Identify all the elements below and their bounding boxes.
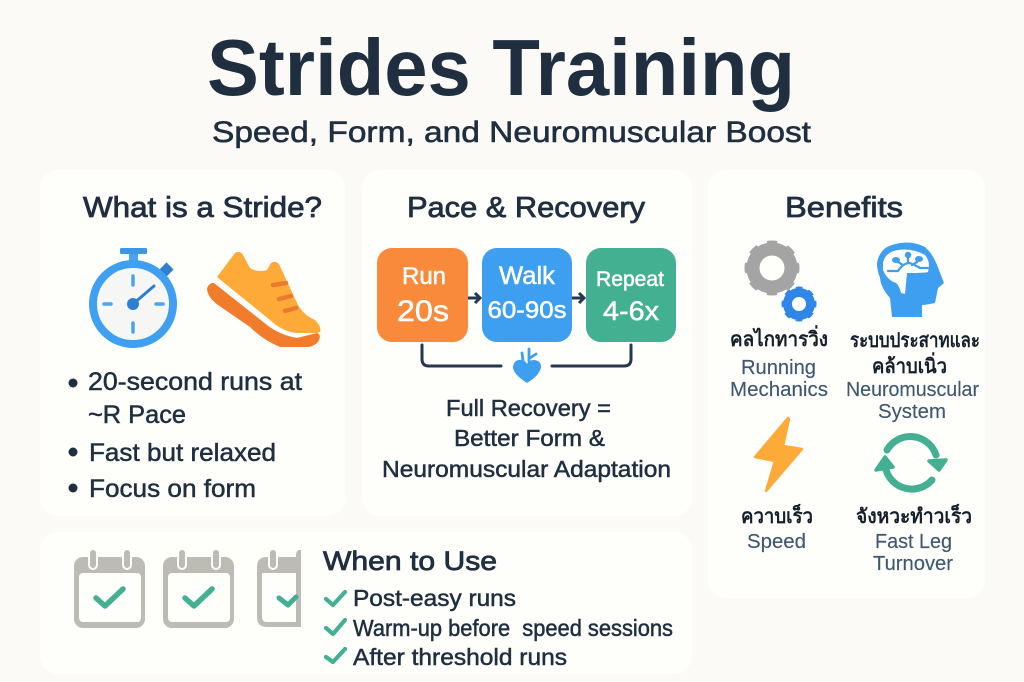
recovery bracket	[422, 345, 631, 366]
bullet list: ~R Pace	[88, 401, 186, 429]
arrow: walk to repeat	[572, 293, 584, 303]
checklist: Post-easy runs	[353, 585, 516, 611]
benefit: speed: ควาบเร็ว	[741, 503, 813, 528]
benefit: fast leg turnover	[856, 503, 972, 575]
box: run: Run	[402, 263, 446, 290]
box: run	[377, 248, 468, 342]
checklist	[326, 585, 673, 670]
icon: calendar two	[163, 549, 234, 628]
benefit: neuromuscular system	[846, 330, 980, 423]
box: run: 20s	[397, 295, 449, 328]
recovery caption: Neuromuscular Adaptation	[382, 456, 671, 482]
heading: what is a stride: What is a Stride?	[83, 192, 322, 224]
bullet list	[68, 368, 302, 503]
benefit: neuromuscular system: Neuromuscular	[846, 379, 979, 401]
bullet list: Focus on form	[89, 475, 256, 503]
benefit: fast leg turnover: Turnover	[873, 553, 953, 575]
arrow: run to walk	[468, 293, 480, 303]
box: repeat	[586, 248, 676, 342]
bullet list: 20-second runs at	[88, 368, 302, 396]
icon: heart	[513, 349, 541, 383]
icon: calendar three cropped	[257, 549, 301, 627]
icon: stopwatch	[93, 248, 174, 344]
heading: pace and recovery: Pace & Recovery	[407, 192, 646, 224]
benefit: running mechanics: คลไกทารวิ่ง	[730, 324, 828, 351]
icon: lightning bolt	[755, 418, 802, 491]
icon: gears	[749, 245, 814, 319]
recovery caption: Full Recovery =	[446, 395, 611, 421]
heading: benefits: Benefits	[785, 192, 903, 224]
recovery caption	[382, 395, 671, 482]
box: walk: 60-90s	[488, 297, 566, 324]
panel: what is a stride	[40, 170, 345, 516]
benefit: neuromuscular system: ระบบประสาทและ	[850, 330, 980, 352]
benefit: speed	[741, 503, 813, 553]
panel: when to use	[40, 532, 692, 674]
panel: benefits	[708, 170, 985, 598]
benefit: running mechanics: Mechanics	[730, 379, 828, 401]
benefit: running mechanics: Running	[741, 357, 816, 379]
icon: calendar one	[74, 549, 145, 628]
benefit: neuromuscular system: คล้าบเนิ่ว	[872, 351, 947, 378]
bullet list: Fast but relaxed	[89, 439, 276, 467]
checklist: Warm-up before speed sessions	[353, 615, 673, 641]
benefit: running mechanics	[730, 324, 828, 401]
benefit: speed: Speed	[747, 531, 806, 553]
icon: running shoe	[207, 252, 320, 347]
box: repeat: Repeat	[596, 268, 664, 291]
box: walk: Walk	[499, 262, 555, 290]
benefit: fast leg turnover: จังหวะทำวเร็ว	[856, 503, 972, 528]
box: repeat: 4-6x	[603, 296, 660, 326]
title: Strides Training	[207, 23, 795, 112]
benefit: fast leg turnover: Fast Leg	[875, 531, 952, 553]
panel: pace and recovery	[362, 170, 692, 516]
recovery caption: Better Form &	[454, 425, 605, 451]
icon: brain head	[877, 242, 944, 317]
benefit: neuromuscular system: System	[878, 401, 946, 423]
icon: cycle arrows	[876, 437, 946, 489]
heading: when to use: When to Use	[323, 546, 497, 576]
checklist: After threshold runs	[353, 644, 567, 670]
box: walk	[482, 248, 572, 342]
subtitle: Speed, Form, and Neuromuscular Boost	[212, 116, 812, 149]
